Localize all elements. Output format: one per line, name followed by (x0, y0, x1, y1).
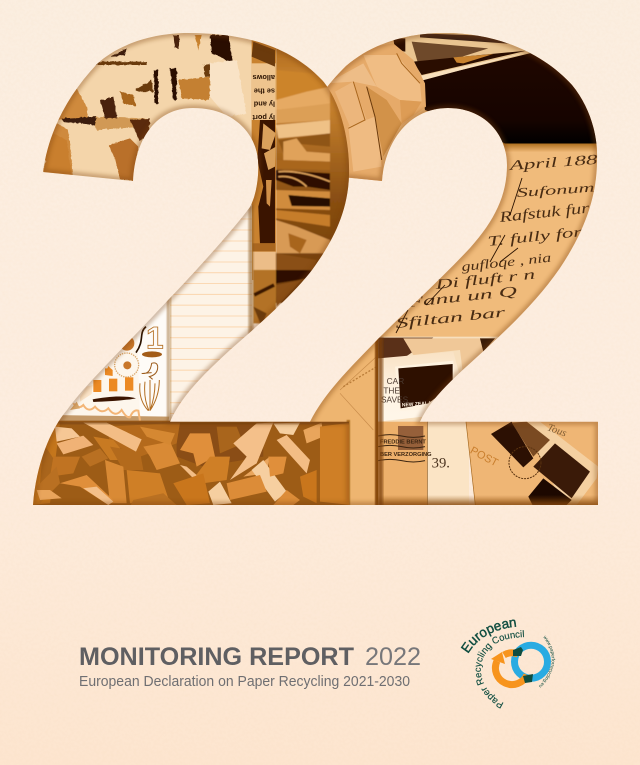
logo: European Paper Recycling Council: www.paperforrecycling.eu (539, 636, 556, 688)
panel: stamped postcards base (378, 422, 600, 507)
title: MONITORING REPORT (79, 643, 354, 671)
panel: photo strip (394, 33, 530, 80)
panel: newspaper text strip: se the (254, 86, 275, 95)
panel: handwritten letter: Sfiltan bar (395, 305, 507, 332)
panel: newspaper text strip: allows (253, 73, 275, 82)
panel: stamped postcards base: Tous (546, 422, 568, 440)
panel: handwritten letter: Fanu un Q (405, 285, 518, 311)
panel: stamped postcards base: 39. (432, 455, 450, 471)
panel: old envelope left (310, 337, 380, 507)
panel: handwritten letter: Rafstuk fur (497, 201, 590, 226)
panel: lined notepaper (168, 205, 254, 425)
panel: stamped postcards base: BER VERZORGING (380, 452, 432, 458)
subtitle: European Declaration on Paper Recycling 2021-2030 (79, 674, 410, 690)
panel: handwritten letter: April 188 (508, 153, 598, 174)
panel: postcard with photograph: SAVES (381, 395, 409, 405)
panel: handwritten letter (328, 33, 598, 340)
icon: numeral one: 1 (146, 319, 164, 355)
panel: postcard with photograph (378, 337, 498, 422)
left numeral inner shadow (33, 33, 349, 505)
panel: handwritten letter: gufloqe , nia (461, 250, 552, 274)
numeral 22 artwork (23, 20, 605, 507)
icon: bird (142, 363, 158, 379)
panel: torn poster (43, 33, 262, 189)
panel: handwritten letter: Sufonum (516, 180, 595, 200)
logo wordmark: European (460, 620, 516, 654)
panel: illustrated icons sheet (58, 298, 170, 422)
right numeral inner shadow (292, 33, 598, 505)
icon: blue ring (514, 645, 548, 678)
panel: postcard with photograph: NEW ZEALAND (402, 400, 439, 409)
logo: European Paper Recycling Council: Paper Recycling Council (476, 630, 524, 709)
panel: stamped postcards base: FREDDIE BERNT (380, 439, 426, 445)
logo: European Paper Recycling Council (460, 620, 556, 709)
right numeral 2 collage (310, 33, 598, 505)
panel: crumpled paper (328, 44, 426, 181)
icon: reeds (140, 380, 159, 411)
title: 2022 (365, 643, 421, 671)
panel: postcard with photograph: CAR (387, 376, 404, 386)
panel: shredded paper base (30, 421, 350, 507)
icon: ring overlaps (513, 647, 523, 656)
panel: folded newspaper stack (253, 38, 352, 327)
panel: stamped postcards base: POST (468, 445, 500, 469)
panel: handwritten letter: Di fluft r n (433, 268, 536, 293)
panel: black photograph band (420, 51, 600, 144)
panel: postcard with photograph: THE (383, 385, 400, 395)
panel: newspaper text strip: ly port (252, 113, 275, 122)
icon: orange ring (495, 661, 527, 685)
panel: handwritten letter: T. fully for (487, 225, 584, 250)
panel: newspaper text strip (252, 40, 276, 280)
left numeral 2 collage (23, 27, 352, 507)
panel: newspaper text strip: ly and (254, 100, 275, 109)
